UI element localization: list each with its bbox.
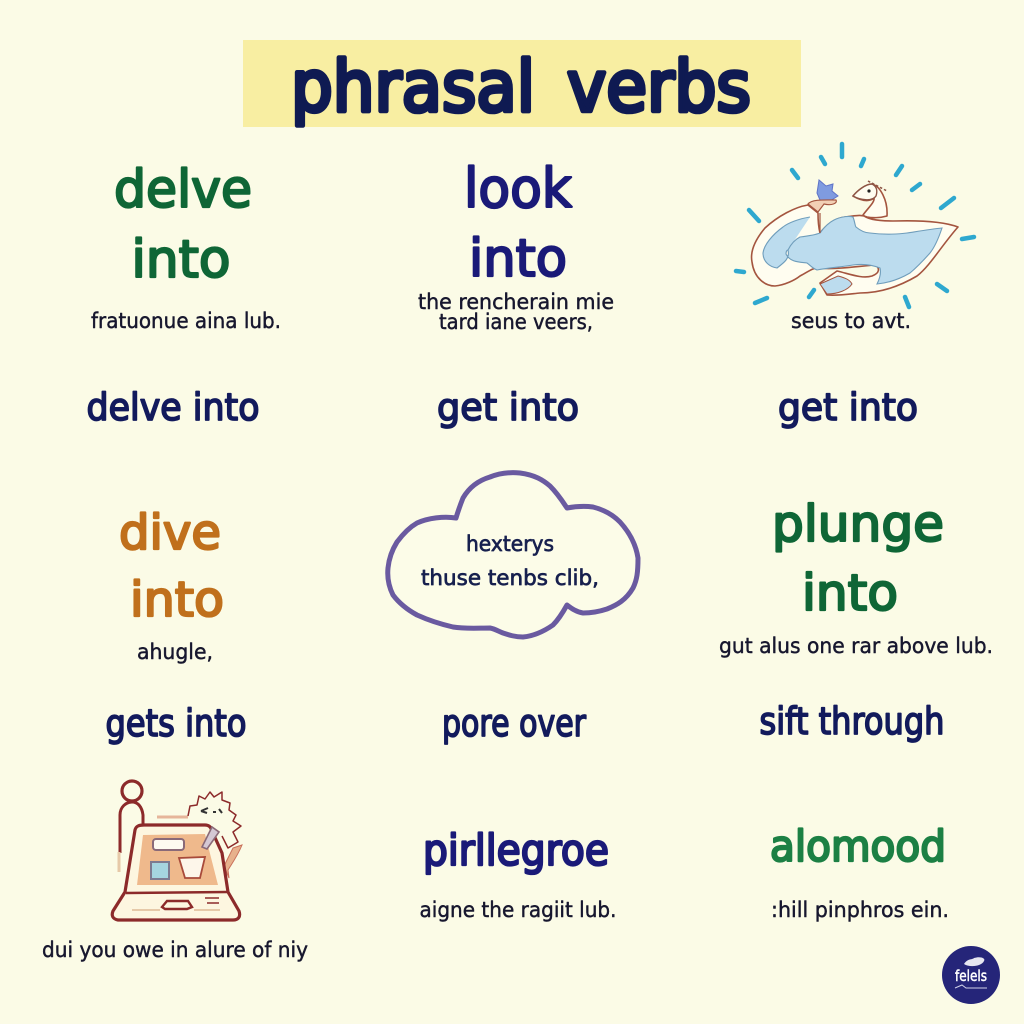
caption: laptop: dui you owe in alure of niy: [42, 938, 308, 962]
heading: look, navy: look: [464, 157, 573, 220]
heading: into, green: into: [802, 564, 898, 622]
title: phrasal: [291, 46, 535, 128]
caption: dive into: ahugle,: [137, 640, 213, 664]
caption: look into: tard iane veers,: [439, 310, 593, 334]
title: verbs: [567, 46, 751, 128]
heading: into, navy: into: [469, 229, 567, 289]
heading: into, green: into: [132, 230, 230, 290]
icon: swimming figure with rays: [736, 144, 974, 307]
caption: look into: [418, 290, 614, 334]
heading: alomood, green: alomood: [770, 822, 946, 872]
caption: pirllegroe: aigne the ragiit lub.: [420, 898, 616, 922]
icon: laptop with person and cat: [112, 781, 242, 920]
callout: cloud: thuse tenbs clib,: [421, 566, 599, 590]
heading: pirllegroe, navy: pirllegroe: [423, 826, 609, 876]
label: sift through: sift through: [760, 700, 944, 743]
caption: plunge into: gut alus one rar above lub.: [719, 634, 993, 658]
badge: logo: [942, 946, 1000, 1004]
label: gets into: gets into: [106, 702, 246, 745]
heading: delve, green: delve: [114, 160, 252, 220]
badge: logo: felels: [955, 967, 987, 985]
label: get into: get into: [778, 386, 918, 429]
callout: cloud: [388, 473, 638, 637]
heading: into, orange: into: [130, 572, 224, 628]
caption: delve into: fratuonue aina lub.: [91, 309, 281, 333]
heading: dive, orange: dive: [119, 505, 221, 561]
label: delve into: delve into: [86, 386, 260, 429]
heading: plunge, green: plunge: [772, 495, 944, 553]
label: pore over: pore over: [442, 702, 587, 745]
label: get into: get into: [437, 386, 579, 429]
caption: icon: seus to avt.: [791, 309, 911, 333]
caption: look into: the rencherain mie: [418, 290, 614, 314]
title: [243, 40, 801, 128]
callout: cloud: hexterys: [466, 532, 554, 556]
caption: alomood: :hill pinphros ein.: [771, 898, 949, 922]
